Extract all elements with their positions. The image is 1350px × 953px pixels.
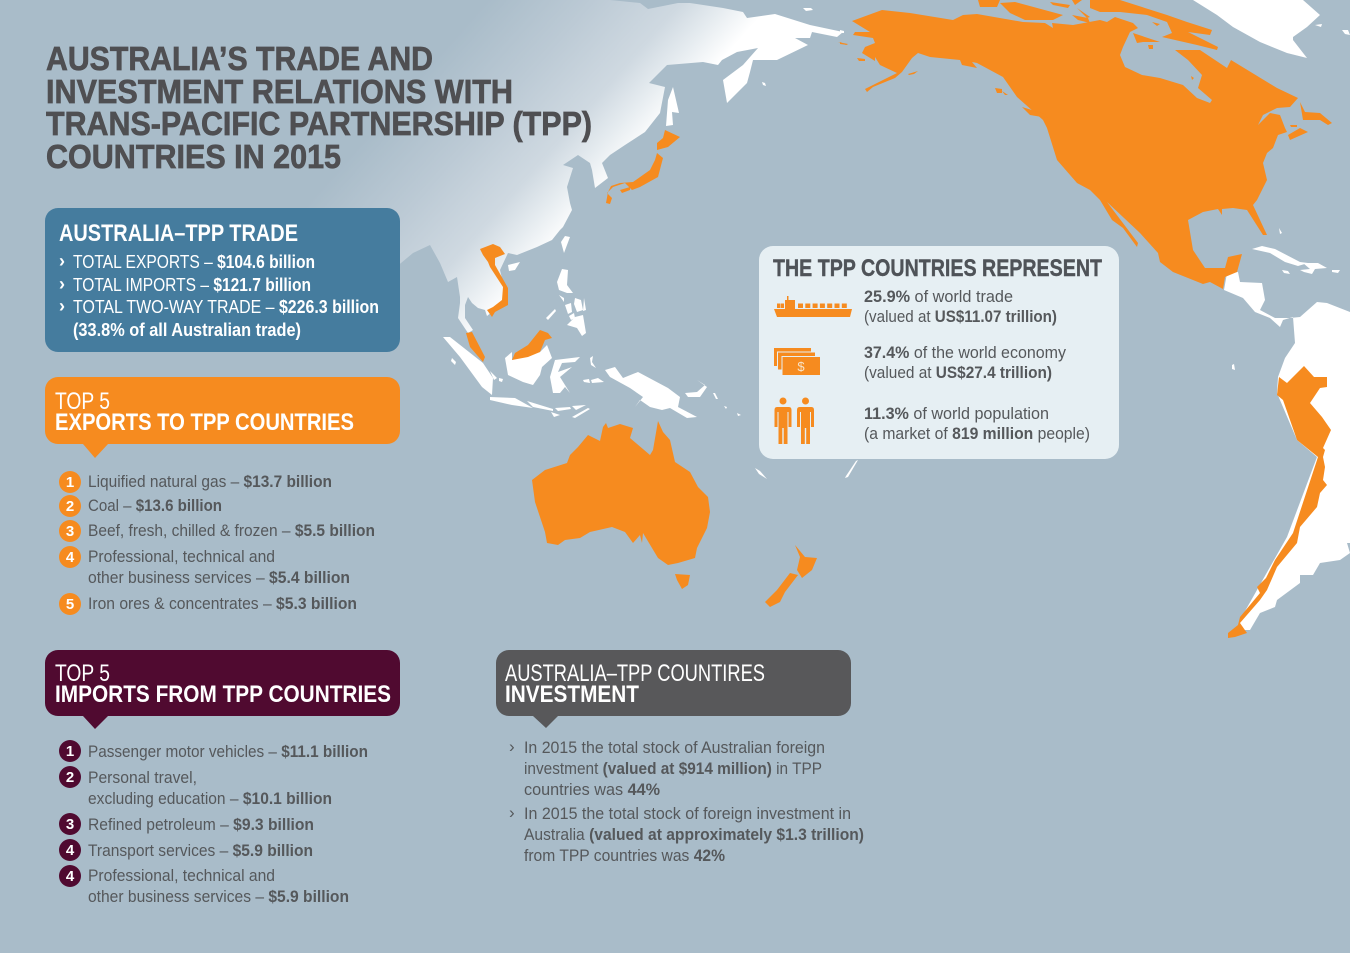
panel: investment header <box>496 650 851 728</box>
list: top 5 imports: Passenger motor vehicles – $11.1 billion <box>88 742 368 761</box>
TPP country: Peru and Chile <box>1228 366 1331 638</box>
trade figures list: TOTAL EXPORTS – $104.6 billion <box>73 252 315 272</box>
panel: top 5 exports header <box>45 377 400 458</box>
text: world economy: 37.4% of the world economy <box>864 343 1066 362</box>
list: top 5 exports: 3 <box>66 523 74 540</box>
list: top 5 exports: Professional, technical and <box>88 547 275 566</box>
heading: exports <box>55 388 354 436</box>
panel: the TPP countries represent <box>759 246 1119 459</box>
heading: Australia-TPP trade: AUSTRALIA–TPP TRADE <box>59 220 298 247</box>
title: INVESTMENT RELATIONS WITH <box>46 73 513 110</box>
heading: exports: EXPORTS TO TPP COUNTRIES <box>55 409 354 436</box>
list: top 5 imports: 2 <box>66 769 74 786</box>
TPP country: Vietnam <box>480 244 508 317</box>
land: white islands of Asia and the Pacific <box>443 8 858 479</box>
heading: exports: TOP 5 <box>55 388 110 415</box>
heading: imports: TOP 5 <box>55 660 110 687</box>
list: top 5 imports: Professional, technical and <box>88 866 275 885</box>
list: top 5 imports: Transport services – $5.9 billion <box>88 841 313 860</box>
list: top 5 exports: 1 <box>66 474 74 491</box>
text: world population <box>864 404 1090 443</box>
world map <box>300 0 1350 638</box>
text block: investment facts: In 2015 the total stock of Australian foreign <box>524 738 825 757</box>
list: top 5 exports: Coal – $13.6 billion <box>88 496 222 515</box>
land: Asia <box>300 0 843 333</box>
trade figures list: › <box>59 296 65 316</box>
list: top 5 exports: other business services – $5.4 billion <box>88 568 350 587</box>
list: top 5 imports: 3 <box>66 816 74 833</box>
text: world population: (a market of 819 million people) <box>864 424 1090 443</box>
panel: top 5 imports header <box>45 650 400 729</box>
text: world trade: 25.9% of world trade <box>864 287 1013 306</box>
text block: investment facts: countries was 44% <box>524 780 660 799</box>
trade figures list: › <box>59 251 65 271</box>
icon: people <box>774 398 814 444</box>
trade figures list: TOTAL TWO-WAY TRADE – $226.3 billion <box>73 297 379 317</box>
land: Caribbean islands <box>1252 228 1340 274</box>
heading: investment: AUSTRALIA–TPP COUNTIRES <box>505 660 765 687</box>
text block: investment facts: from TPP countries was 42% <box>524 846 725 865</box>
list: top 5 imports: other business services – $5.9 billion <box>88 887 349 906</box>
icon: banknotes: $ <box>797 359 805 374</box>
TPP country: Japan <box>606 130 680 204</box>
list: top 5 imports: 4 <box>66 868 75 885</box>
TPP country: Australia <box>532 421 710 589</box>
icon: ship <box>774 296 852 317</box>
list: top 5 exports: Beef, fresh, chilled & frozen – $5.5 billion <box>88 521 375 540</box>
TPP country: Malaysia <box>466 330 552 362</box>
list: top 5 exports: 2 <box>66 498 74 515</box>
list: top 5 imports: Refined petroleum – $9.3 billion <box>88 815 314 834</box>
text: world trade <box>864 287 1057 326</box>
trade figures list: › <box>59 274 65 294</box>
heading: investment <box>505 660 765 708</box>
list: top 5 exports: Liquified natural gas – $13.7 billion <box>88 472 332 491</box>
text: world trade: (valued at US$11.07 trillion) <box>864 307 1057 326</box>
list: top 5 exports: 4 <box>66 549 75 566</box>
text block: investment facts: In 2015 the total stock of foreign investment in <box>524 804 851 823</box>
title <box>46 40 592 175</box>
TPP country: New Zealand <box>765 545 817 607</box>
trade figures list <box>59 251 379 340</box>
text: world population: 11.3% of world population <box>864 404 1049 423</box>
list: top 5 imports: 4 <box>66 842 75 859</box>
heading: imports: IMPORTS FROM TPP COUNTRIES <box>55 681 391 708</box>
list: top 5 exports: Iron ores & concentrates – $5.3 billion <box>88 594 357 613</box>
text: world economy <box>864 343 1066 382</box>
text: world economy: (valued at US$27.4 trillion) <box>864 363 1052 382</box>
trade figures list: (33.8% of all Australian trade) <box>73 320 301 340</box>
title: AUSTRALIA’S TRADE AND <box>46 40 433 77</box>
list: top 5 exports: 5 <box>66 596 74 613</box>
land: Greenland and Iceland <box>1193 0 1350 58</box>
title: COUNTRIES IN 2015 <box>46 138 341 175</box>
text block: investment facts: › <box>509 737 515 756</box>
TPP country: North America <box>838 0 1332 289</box>
list: top 5 imports: Personal travel, <box>88 768 197 787</box>
icon: banknotes <box>774 348 820 376</box>
text block: investment facts <box>509 737 864 865</box>
text block: investment facts: Australia (valued at approximately $1.3 trillion) <box>524 825 864 844</box>
trade figures list: TOTAL IMPORTS – $121.7 billion <box>73 275 311 295</box>
list: top 5 imports: 1 <box>66 743 74 760</box>
title: TRANS-PACIFIC PARTNERSHIP (TPP) <box>46 105 592 142</box>
land: Central and South America <box>1224 272 1350 630</box>
list: top 5 imports <box>59 740 368 906</box>
list: top 5 exports <box>59 471 375 615</box>
panel: Australia-TPP trade <box>45 208 400 352</box>
text block: investment facts: › <box>509 803 515 822</box>
heading: imports <box>55 660 391 708</box>
list: top 5 imports: excluding education – $10.1 billion <box>88 789 332 808</box>
text block: investment facts: investment (valued at $914 million) in TPP <box>524 759 822 778</box>
heading: investment: INVESTMENT <box>505 681 639 708</box>
heading: the TPP countries represent: THE TPP COUNTRIES REPRESENT <box>773 255 1102 282</box>
